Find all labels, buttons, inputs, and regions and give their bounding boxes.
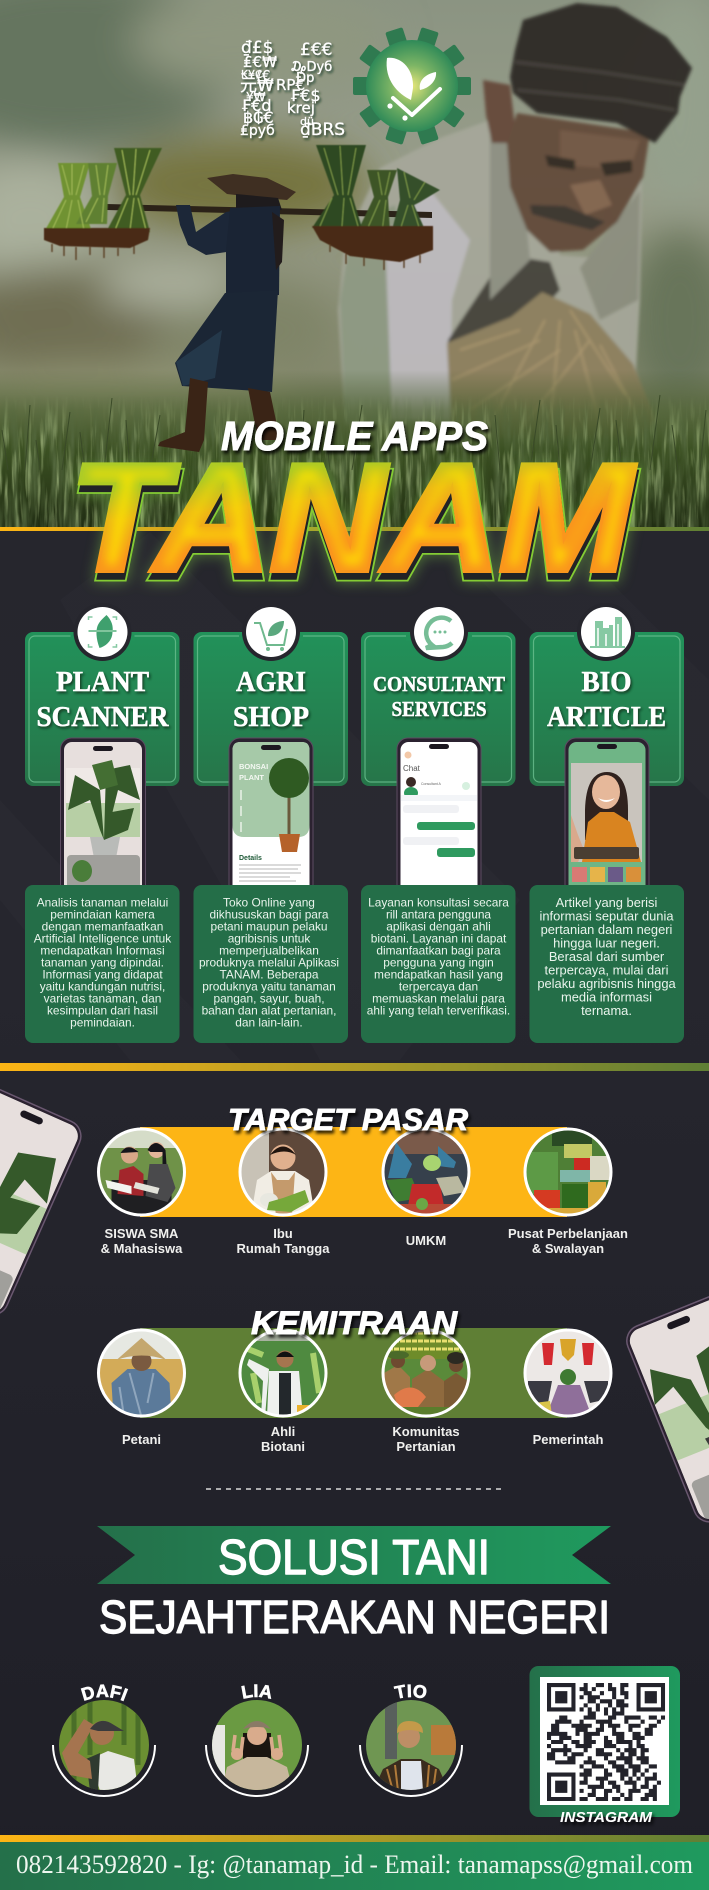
labels: Pusat Perbelanjaan xyxy=(508,1226,628,1241)
heading: CONSULTANT xyxy=(373,672,505,696)
text panel: agri shop description: pangan, sayur, buah, xyxy=(213,992,325,1006)
team member: Tio xyxy=(359,1684,463,1797)
labels: Rumah Tangga xyxy=(237,1241,330,1256)
text panel: plant scanner description: pemindaian kamera xyxy=(50,908,155,922)
text panel: plant scanner description: Analisis tanaman melalui xyxy=(37,896,168,910)
text panel: agri shop description: petani maupun pelaku xyxy=(210,920,328,934)
text panel: consultant services description: memuaskan melalui para xyxy=(372,992,505,1006)
labels: & Swalayan xyxy=(532,1241,604,1256)
labels: Pertanian xyxy=(396,1439,456,1454)
card xyxy=(530,632,684,786)
panel: consultant services xyxy=(361,603,516,908)
heading: BIO xyxy=(582,667,632,698)
text panel: bio article description: terpercaya, mulai dari xyxy=(545,962,668,978)
panel: bio article: ARTICLE xyxy=(547,702,666,733)
phone: plant scan screen xyxy=(60,738,146,908)
text panel: agri shop description: produknya yaitu tanaman xyxy=(202,980,336,994)
panel: consultant services: SERVICES xyxy=(392,697,486,721)
panel: plant scanner: SCANNER xyxy=(36,702,169,733)
text panel: bio article description: ternama. xyxy=(581,1003,632,1018)
green band xyxy=(140,1328,567,1418)
Instagram label: INSTAGRAM xyxy=(560,1809,653,1826)
title: TANAM: TANAM xyxy=(71,440,637,610)
logo: currency letter K: ɖü xyxy=(300,115,314,128)
panel: bio article xyxy=(530,603,684,908)
logo: currency letter K: ₤руб xyxy=(240,123,275,139)
heading: PLANT xyxy=(56,667,149,698)
text panel: bio article description: hingga luar negeri. xyxy=(553,936,660,950)
labels: Petani xyxy=(122,1432,161,1447)
team member: Dafi xyxy=(52,1684,156,1797)
text panel: plant scanner description: kesimpulan dari hasil xyxy=(47,1004,158,1018)
logo: currency letter K: ₣€$ xyxy=(290,86,321,105)
dark section diagonal shading xyxy=(0,532,709,1060)
footer contact xyxy=(0,1842,709,1890)
slogan ribbon xyxy=(97,1526,611,1585)
text panel: agri shop description: agribisnis untuk xyxy=(228,932,310,946)
labels: UMKM xyxy=(406,1233,446,1248)
text panel: bio article description: pelaku agribisnis hingga xyxy=(537,976,676,991)
team member: Tio: TIO xyxy=(394,1684,426,1698)
hero photo: farmers in rice field xyxy=(0,0,709,531)
card xyxy=(361,632,516,786)
text panel: consultant services description: pengguna yang ingin xyxy=(383,956,494,970)
yellow band xyxy=(140,1127,567,1217)
text panel: consultant services description: mendapatkan hasil yang xyxy=(374,968,503,982)
logo: currency letter K: £€€ xyxy=(300,40,332,60)
slogan line 1: SOLUSI TANI xyxy=(218,1531,490,1585)
logo: currency letter K: ₤€₩ xyxy=(243,53,277,71)
phone: chat screen: Consultant A xyxy=(421,782,442,786)
text panel: bio article description xyxy=(530,885,684,1043)
text panel: plant scanner description: Artificial Intelligence untuk xyxy=(34,932,171,946)
labels: Ahli xyxy=(271,1424,295,1439)
text panel: consultant services description: dimanfaatkan bagi para xyxy=(376,944,501,958)
logo: currency letter K xyxy=(240,38,345,140)
woman carrying rice seedlings xyxy=(44,145,440,452)
text panel: agri shop description: TANAM. Beberapa xyxy=(220,968,319,982)
text panel: agri shop description: produknya melalui Aplikasi xyxy=(199,956,339,970)
text panel: plant scanner description: Informasi yang didapat xyxy=(42,968,163,982)
hero accent line xyxy=(0,527,709,531)
logo: currency letter K: ฿₲€ xyxy=(243,108,274,127)
text panel: plant scanner description: dengan memanfaatkan xyxy=(42,920,163,934)
icon: leaf scanner xyxy=(74,603,132,661)
photo: farmer xyxy=(100,1332,183,1414)
phone: bonsai product screen: BONSAI xyxy=(239,762,268,771)
logo: currency letter K: ₭¥₡ xyxy=(241,68,262,81)
labels xyxy=(101,1226,628,1256)
logo: currency letter K: 元₩ xyxy=(240,76,274,96)
phone: bonsai product screen xyxy=(229,738,313,908)
panel: agri shop xyxy=(194,603,348,908)
text panel: plant scanner description: tanaman yang dipindai. xyxy=(41,956,164,970)
photo: housewife xyxy=(242,1130,324,1214)
slogan line 2: SEJAHTERAKAN NEGERI xyxy=(99,1591,610,1643)
phone: chat screen xyxy=(397,738,481,908)
logo: currency letter K: Ðp xyxy=(296,71,314,86)
section: target pasar xyxy=(98,1102,628,1256)
text panel: plant scanner description: varietas tanaman, dan xyxy=(44,992,161,1006)
text panel: plant scanner description: yaitu kandungan nutrisi, xyxy=(40,980,165,994)
text panel: plant scanner description xyxy=(25,885,180,1043)
logo: currency letter K: ₫BRS xyxy=(300,120,345,140)
labels: Ibu xyxy=(273,1226,293,1241)
text panel: consultant services description: rill antara pengguna xyxy=(386,908,491,922)
phone: bonsai product screen: PLANT xyxy=(239,773,264,782)
divider bar xyxy=(0,1063,709,1071)
text panel: consultant services description xyxy=(361,885,516,1043)
labels: & Mahasiswa xyxy=(101,1241,183,1256)
QR code panel xyxy=(530,1666,680,1826)
text panel: bio article description: Berasal dari sumber xyxy=(549,949,665,964)
icon: chat letter C xyxy=(410,603,468,661)
card xyxy=(194,632,348,786)
logo: currency letter K: krej xyxy=(287,99,315,117)
circular photo frames xyxy=(98,1129,611,1215)
icon: shopping cart with leaf xyxy=(242,603,300,661)
photo: market stall xyxy=(384,1130,468,1214)
title: TANAM: TANAM xyxy=(71,440,637,610)
labels: Biotani xyxy=(261,1439,305,1454)
photo: vegetables shelf xyxy=(526,1130,610,1214)
title: TANAM: TANAM xyxy=(71,440,637,610)
text panel: agri shop description: bahan dan alat pertanian, xyxy=(202,1004,336,1018)
circular photo frames xyxy=(98,1330,611,1416)
QR code xyxy=(547,1685,665,1799)
logo: currency letter K: ₣€d xyxy=(241,96,272,115)
phone: video call screen xyxy=(565,738,649,908)
text panel: plant scanner description: mendapatkan Informasi xyxy=(40,944,165,958)
text panel: consultant services description: ahli yang telah terverifikasi. xyxy=(367,1004,510,1018)
phone: chat screen: Chat xyxy=(403,764,421,773)
text panel: agri shop description xyxy=(194,885,348,1043)
text panel: bio article description: pertanian dalam negeri xyxy=(541,922,672,937)
photo: botanist xyxy=(242,1332,324,1414)
text panel: bio article description: Artikel yang berisi xyxy=(556,895,657,910)
footer gradient bar xyxy=(0,1835,709,1842)
text panel: consultant services description: Layanan konsultasi secara xyxy=(368,896,509,910)
team member: Lia xyxy=(205,1684,309,1797)
labels xyxy=(122,1424,603,1454)
subtitle: MOBILE APPS: MOBILE APPS xyxy=(221,413,488,459)
text panel: bio article description: informasi seputar dunia xyxy=(540,908,674,924)
text panel: consultant services description: terpercaya dan xyxy=(399,980,478,994)
heading: TARGET PASAR xyxy=(228,1102,469,1137)
text panel: agri shop description: memperjualbelikan xyxy=(219,944,319,958)
text panel: agri shop description: dikhususkan bagi para xyxy=(210,908,329,922)
text panel: bio article description: media informasi xyxy=(561,990,652,1004)
man with turban harvesting rice xyxy=(338,3,692,438)
labels: Komunitas xyxy=(392,1424,460,1439)
logo: currency letter K: € xyxy=(262,69,270,84)
team member: Dafi: DAFI xyxy=(80,1684,128,1702)
photo: farming community xyxy=(384,1332,468,1414)
logo: currency letter K: ₯Dуб xyxy=(290,60,332,75)
phone: bonsai product screen: Details xyxy=(239,855,262,862)
logo: currency letter K: ¥₩ xyxy=(246,90,266,104)
panel: plant scanner xyxy=(25,603,180,908)
dashed separator xyxy=(206,1488,504,1490)
logo: currency letter K: ₫£$ xyxy=(241,38,273,58)
heading: AGRI xyxy=(236,667,306,698)
tilted phone left xyxy=(0,1082,86,1320)
card xyxy=(25,632,180,786)
icon: article chart xyxy=(577,603,635,661)
labels: SISWA SMA xyxy=(105,1226,179,1241)
labels: Pemerintah xyxy=(533,1432,603,1447)
footer contact: 082143592820 - Ig: @tanamap_id - Email: tanamapss@gmail.com xyxy=(16,1850,693,1879)
section: kemitraan xyxy=(98,1305,612,1454)
logo: currency letter K: RP€ xyxy=(276,76,305,94)
photo: government meeting xyxy=(526,1332,610,1414)
text panel: agri shop description: Toko Online yang xyxy=(223,896,315,910)
grass foreground xyxy=(0,370,709,531)
title: TANAM: TANAM xyxy=(70,433,636,603)
text panel: consultant services description: biotani. Layanan ini dapat xyxy=(371,932,507,946)
text panel: plant scanner description: pemindaian. xyxy=(70,1016,135,1030)
team member: Lia: LIA xyxy=(241,1684,272,1699)
tilted phone right xyxy=(622,1290,709,1527)
text panel: consultant services description: aplikasi dengan ahli xyxy=(386,920,491,934)
text panel: agri shop description: dan lain-lain. xyxy=(235,1016,303,1030)
title: TANAM: TANAM xyxy=(70,433,636,603)
photo: students xyxy=(100,1130,183,1214)
panel: agri shop: SHOP xyxy=(233,702,309,733)
logo: gear with leaf and check xyxy=(353,27,471,145)
heading: KEMITRAAN xyxy=(251,1305,459,1341)
